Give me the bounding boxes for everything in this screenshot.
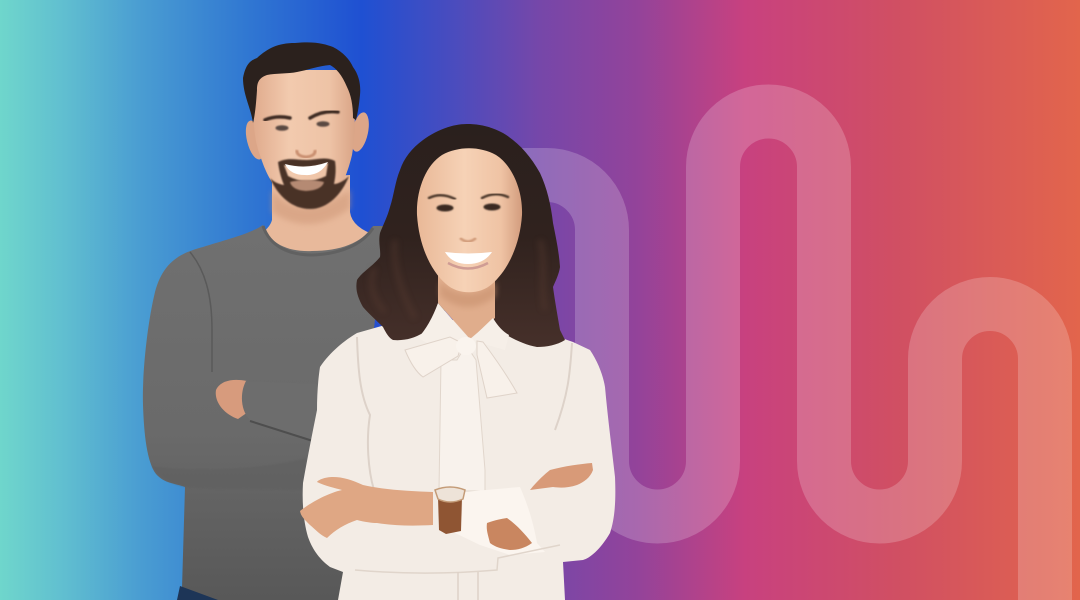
man's folded sleeve bbox=[242, 381, 320, 441]
woman's mouth bbox=[445, 252, 492, 264]
man's beard bbox=[270, 158, 349, 209]
man's left ear bbox=[242, 119, 268, 161]
man's face bbox=[254, 70, 355, 209]
woman's neck bbox=[438, 270, 495, 339]
woman's watch face bbox=[435, 487, 465, 502]
woman's hair bbox=[356, 124, 565, 347]
woman's eyebrows bbox=[429, 194, 508, 199]
man's fold shadow bbox=[250, 421, 316, 442]
bow left loop bbox=[405, 337, 462, 377]
woman's collar left bbox=[418, 303, 470, 350]
woman's hair highlights bbox=[372, 240, 545, 318]
man's neck bbox=[258, 175, 378, 262]
woman's back hand bbox=[530, 463, 593, 490]
man's mouth bbox=[285, 162, 328, 175]
woman's face bbox=[417, 148, 522, 292]
man's jeans bbox=[177, 586, 218, 600]
bow knot bbox=[456, 337, 476, 355]
man's neck shadow bbox=[272, 190, 350, 224]
man's chin skin patch bbox=[290, 180, 324, 191]
sleeve seam bbox=[190, 252, 212, 372]
woman's neck shadow bbox=[440, 282, 496, 307]
man's lower sleeve shade bbox=[152, 458, 306, 490]
man's collar shade bbox=[263, 226, 373, 255]
bow center tail bbox=[439, 345, 485, 491]
blouse placket bbox=[458, 572, 478, 600]
woman's arm opening bbox=[487, 518, 532, 550]
woman's cuff bbox=[453, 487, 545, 555]
woman's collar right bbox=[470, 318, 509, 350]
woman's blouse bbox=[303, 320, 615, 600]
man bbox=[143, 42, 385, 600]
lower forearm edge bbox=[355, 545, 560, 573]
man's nose bbox=[297, 150, 315, 157]
woman's nose bbox=[460, 238, 476, 242]
woman's front hand bbox=[300, 477, 433, 538]
blouse shading bbox=[357, 337, 572, 490]
woman's watch strap bbox=[438, 497, 462, 534]
woman's eyes bbox=[436, 204, 500, 212]
man's hand bbox=[216, 380, 248, 419]
woman's lips bbox=[448, 263, 488, 268]
man's hair bbox=[243, 42, 360, 123]
woman bbox=[300, 124, 615, 600]
man's eyebrows bbox=[265, 112, 338, 120]
man's sweater bbox=[143, 225, 385, 600]
man's right ear bbox=[348, 111, 372, 153]
decorative wave ribbon bbox=[515, 112, 1045, 600]
man's eyes bbox=[276, 121, 330, 131]
bow bbox=[405, 337, 517, 491]
bow right tail bbox=[477, 341, 517, 398]
